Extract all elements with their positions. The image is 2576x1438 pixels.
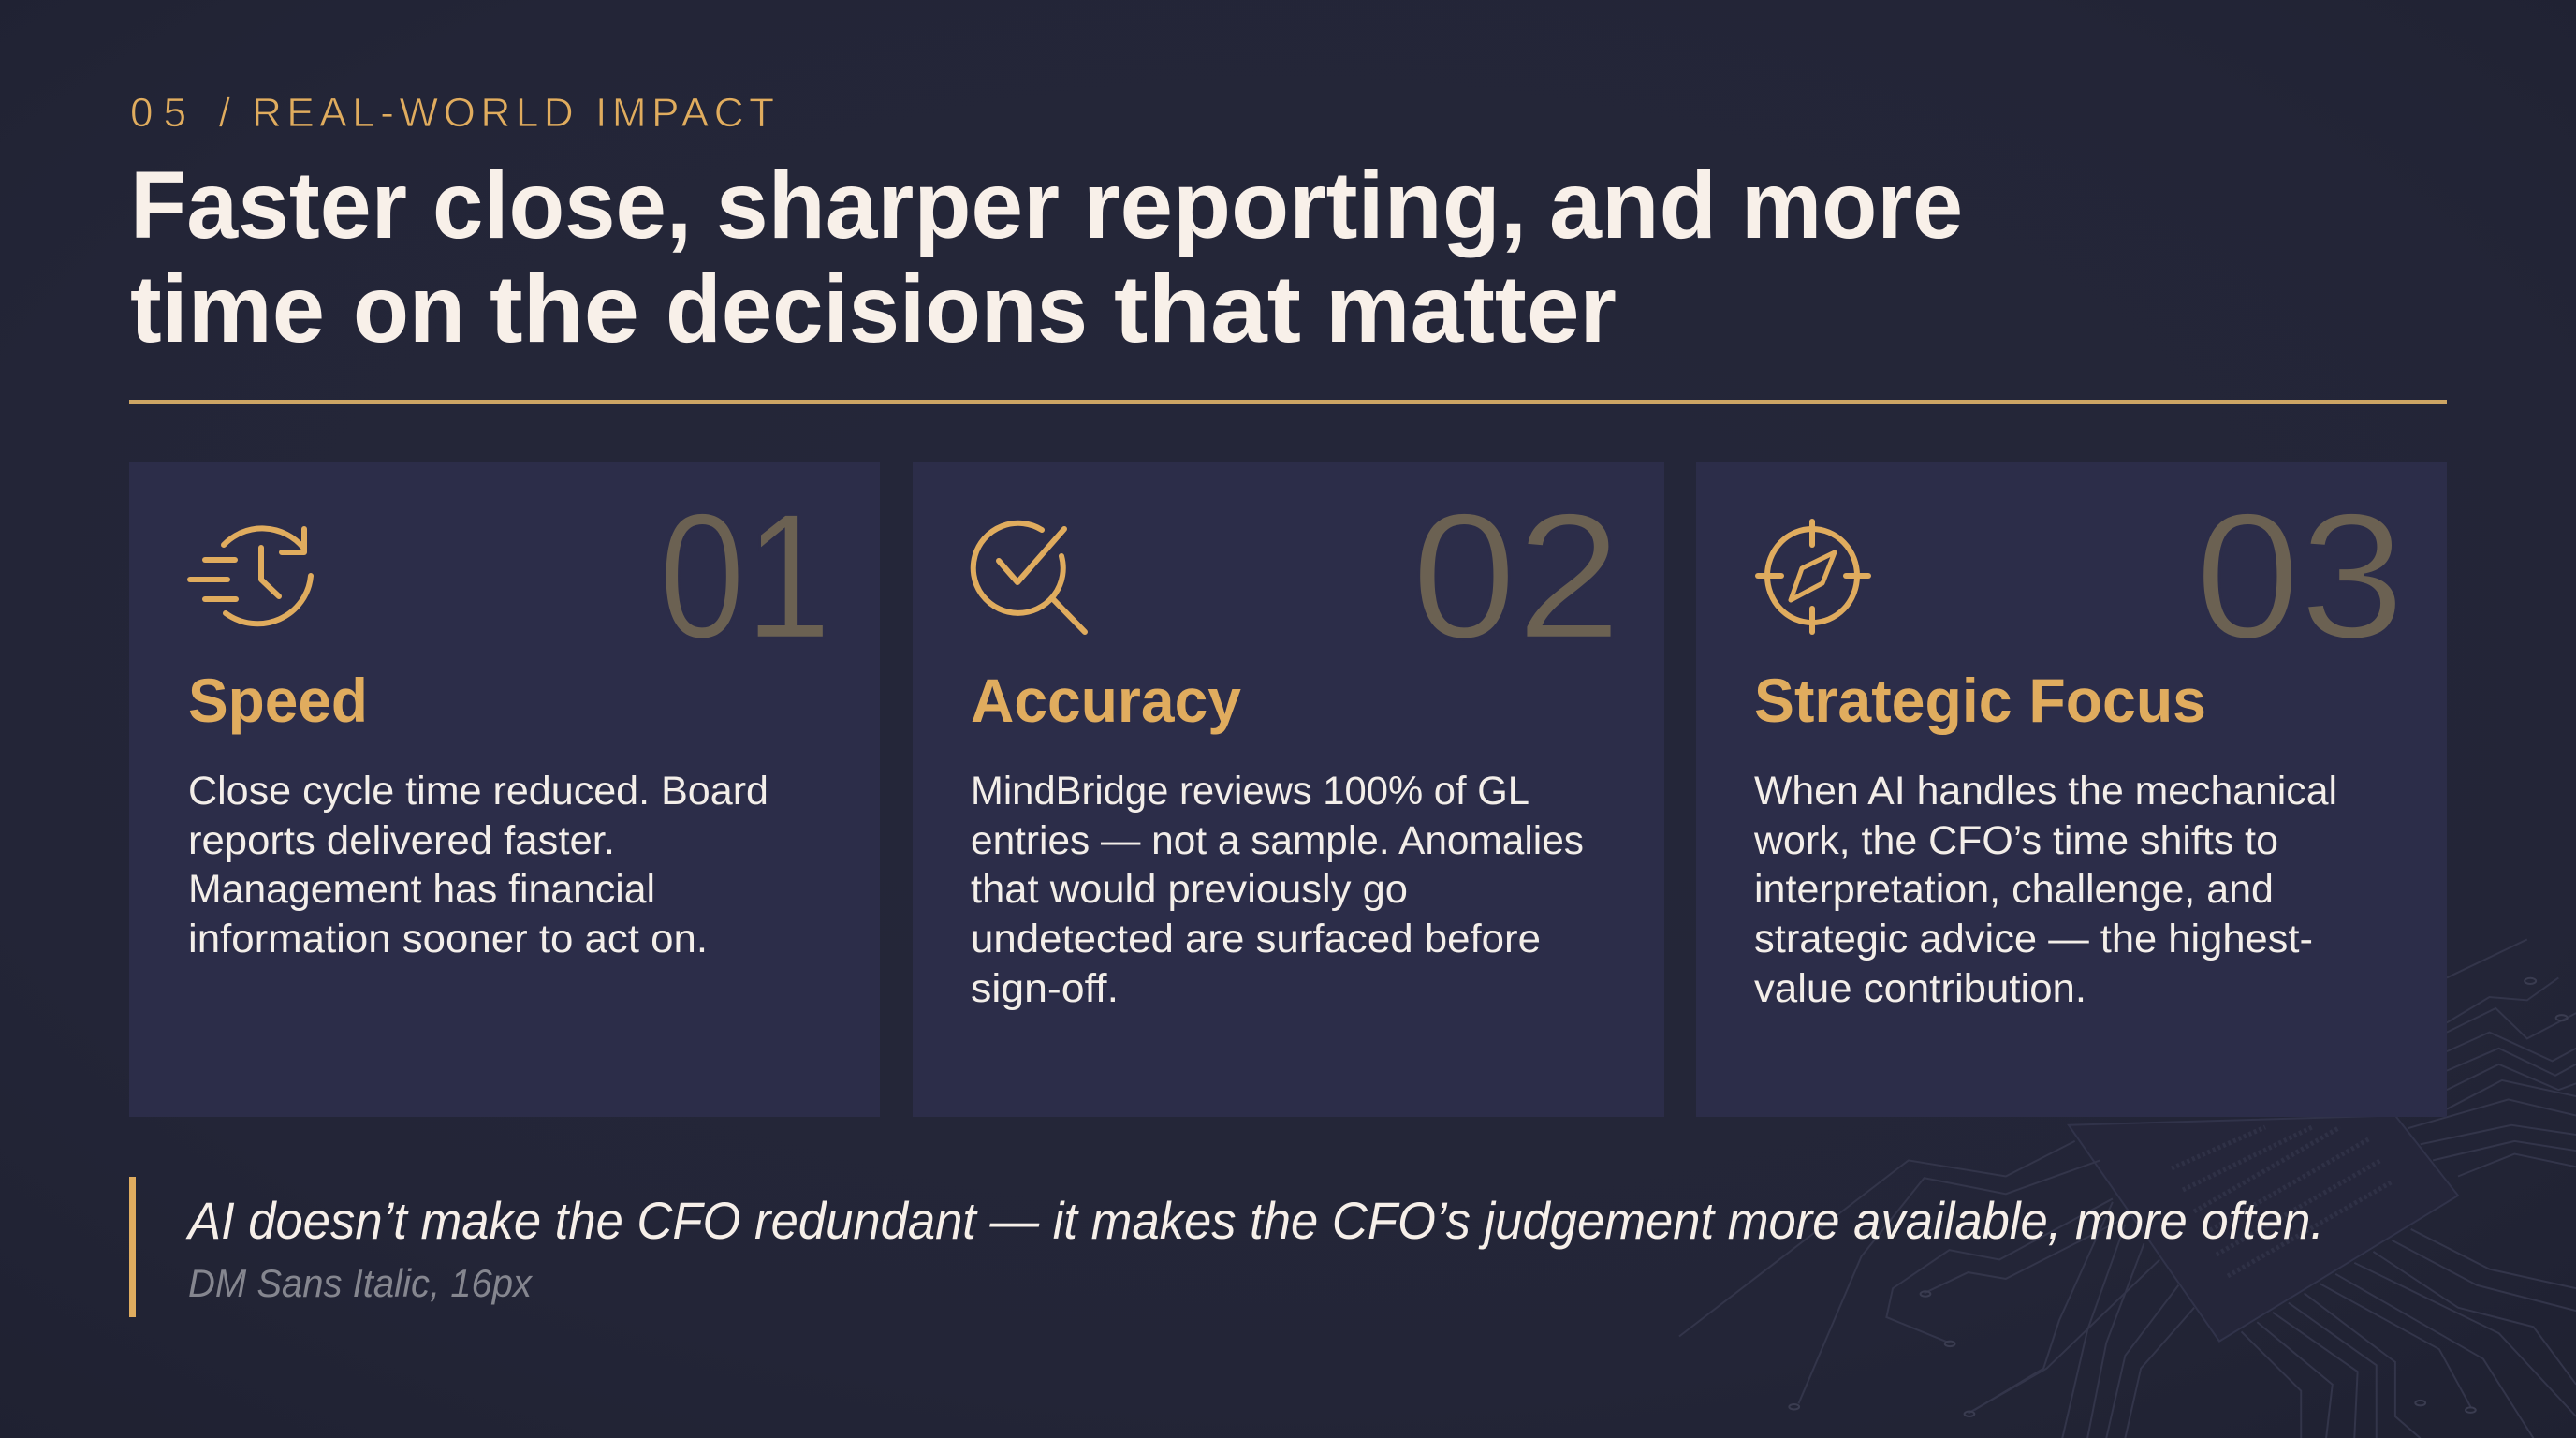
circuit board decoration <box>1679 939 2576 1438</box>
body text: speed: Close cycle time reduced. Board <box>188 769 768 814</box>
title: on <box>353 256 465 362</box>
body text: speed <box>188 769 768 961</box>
title: the <box>490 256 639 362</box>
title: sharper <box>716 152 1060 258</box>
body text: strategic focus: work, the CFO’s time shifts to <box>1753 818 2278 863</box>
number 03: 03 <box>2195 477 2405 676</box>
quote text: AI doesn’t make the CFO redundant — it makes the CFO’s judgement more available, more often. <box>185 1191 2324 1250</box>
body text: strategic focus: value contribution. <box>1754 966 2086 1011</box>
body text: speed: Management has financial <box>188 867 655 912</box>
title: and <box>1549 152 1717 258</box>
title: Faster <box>130 152 407 258</box>
icon: magnifier with check <box>973 523 1085 632</box>
body text: accuracy: that would previously go <box>971 867 1408 912</box>
eyebrow label: 05 / <box>130 90 231 136</box>
icon: compass <box>1758 521 1868 632</box>
body text: accuracy: MindBridge reviews 100% of GL <box>971 769 1530 814</box>
body text: strategic focus <box>1753 769 2337 1011</box>
body text: accuracy: entries — not a sample. Anomalies <box>971 818 1584 863</box>
panel: accuracy <box>913 462 1664 1117</box>
title: close, <box>432 152 692 258</box>
eyebrow label: REAL-WORLD IMPACT <box>252 90 774 136</box>
title: that <box>1114 256 1301 362</box>
heading: speed: Speed <box>188 666 368 735</box>
heading: accuracy: Accuracy <box>971 666 1241 735</box>
heading: strategic focus: Strategic Focus <box>1754 666 2206 735</box>
callout: quote <box>129 1177 2324 1317</box>
panel: strategic focus <box>1696 462 2447 1117</box>
title <box>130 152 1963 362</box>
chip data rows <box>2172 1127 2393 1276</box>
body text: accuracy: undetected are surfaced before <box>971 917 1541 961</box>
quote caption: DM Sans Italic, 16px <box>188 1261 534 1305</box>
title rule <box>129 400 2447 404</box>
number 01: 01 <box>659 477 831 676</box>
body text: strategic focus: interpretation, challenge, and <box>1754 867 2274 912</box>
title: decisions <box>666 256 1088 362</box>
title: more <box>1741 152 1963 258</box>
body text: accuracy: sign-off. <box>971 966 1119 1011</box>
body text: speed: reports delivered faster. <box>188 818 615 863</box>
title: matter <box>1325 256 1617 362</box>
panel: speed <box>129 462 880 1117</box>
icon: clock with motion lines <box>190 528 311 624</box>
body text: speed: information sooner to act on. <box>188 917 708 961</box>
title: reporting, <box>1083 152 1527 258</box>
body text: accuracy <box>971 769 1584 1011</box>
body text: strategic focus: strategic advice — the highest- <box>1754 917 2313 961</box>
title: time <box>130 256 325 362</box>
body text: strategic focus: When AI handles the mechanical <box>1754 769 2337 814</box>
number 02: 02 <box>1412 477 1621 676</box>
quote accent bar <box>129 1177 136 1317</box>
